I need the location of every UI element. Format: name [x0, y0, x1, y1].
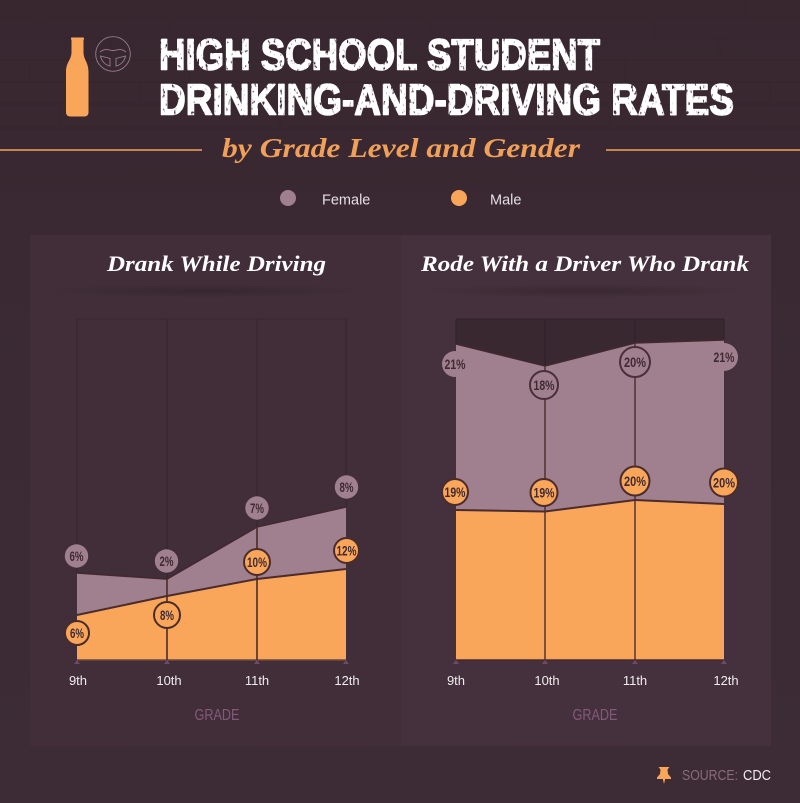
icon: push pin	[657, 767, 671, 784]
x axis labels	[69, 673, 360, 688]
x axis labels: 11th	[245, 673, 269, 688]
panel: drank while driving	[30, 235, 401, 746]
axis title: GRADE	[194, 707, 240, 724]
data labels: male: 19%	[534, 484, 555, 500]
x axis labels: 12th	[334, 673, 360, 688]
icon: beer bottle	[66, 38, 88, 116]
data labels: male: 20%	[713, 474, 735, 490]
axis title: GRADE	[572, 707, 618, 724]
data labels: female	[442, 343, 738, 399]
data labels: male: 8%	[160, 607, 174, 623]
data labels: female: 6%	[70, 548, 84, 564]
x axis labels: 9th	[69, 673, 87, 688]
heading: rode with a driver who drank: Rode With a Driver Who Drank	[420, 251, 749, 276]
source: SOURCE:	[682, 767, 738, 784]
area chart: drank while driving	[74, 507, 349, 664]
data labels: male: 6%	[70, 625, 84, 641]
data labels: male: 19%	[444, 484, 466, 500]
data labels: female: 21%	[714, 349, 735, 365]
data labels: male: 12%	[336, 542, 357, 558]
data labels: female: 20%	[624, 354, 646, 370]
x axis labels: 12th	[713, 673, 739, 688]
data labels: male	[442, 466, 738, 506]
title: HIGH SCHOOL STUDENT	[159, 30, 600, 80]
data labels: female	[65, 475, 358, 573]
data labels: male: 20%	[624, 473, 646, 489]
data labels: male	[65, 538, 359, 645]
data labels: female: 7%	[250, 500, 264, 516]
x axis labels: 10th	[156, 673, 182, 688]
data labels: female: 8%	[340, 479, 354, 495]
subtitle: by Grade Level and Gender	[222, 133, 581, 163]
legend: Male	[490, 192, 521, 208]
legend	[280, 190, 521, 208]
legend: Female	[322, 192, 370, 208]
data labels: male: 10%	[247, 554, 267, 570]
data labels: female: 18%	[534, 377, 555, 393]
area chart: rode with a driver who drank	[453, 340, 727, 664]
data labels: female: 21%	[444, 356, 466, 372]
x axis labels: 9th	[447, 673, 465, 688]
title	[159, 30, 734, 124]
panel: rode with a driver who drank	[401, 235, 771, 746]
x axis labels: 11th	[623, 673, 647, 688]
heading: drank while driving: Drank While Driving	[106, 251, 326, 276]
source: CDC	[743, 767, 771, 784]
x axis labels: 10th	[534, 673, 560, 688]
x axis labels	[447, 673, 739, 688]
data labels: female: 2%	[160, 553, 174, 569]
icon: steering wheel	[96, 37, 130, 71]
